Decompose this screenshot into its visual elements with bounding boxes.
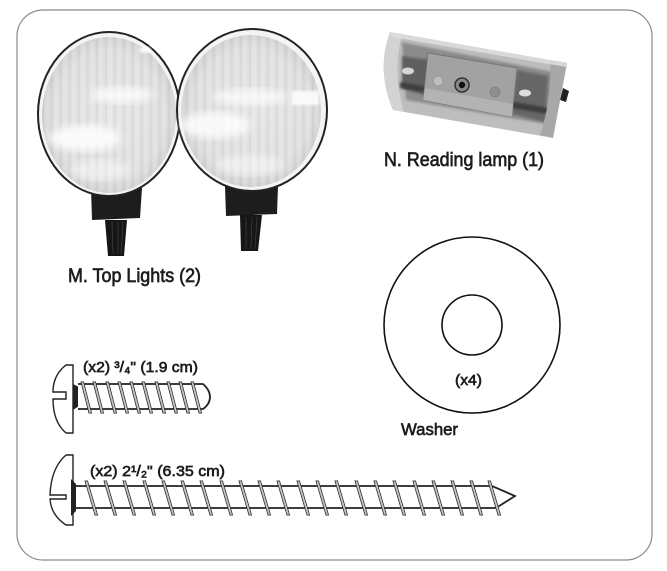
icon: long screw xyxy=(50,455,515,525)
icon: short screw xyxy=(53,365,210,433)
label: short screw size: (x2) ³/₄" (1.9 cm) xyxy=(83,359,198,376)
icon: reading lamp xyxy=(384,32,569,138)
icon: right top light xyxy=(176,28,328,251)
label: reading lamp: N. Reading lamp (1) xyxy=(384,150,544,171)
label: long screw size: (x2) 2¹/₂" (6.35 cm) xyxy=(90,463,225,480)
icon: left top light xyxy=(37,31,181,256)
label: top lights: M. Top Lights (2) xyxy=(68,266,201,287)
label: washer quantity: (x4) xyxy=(455,373,482,389)
icon: washer xyxy=(384,237,560,413)
label: washer: Washer xyxy=(401,420,458,439)
